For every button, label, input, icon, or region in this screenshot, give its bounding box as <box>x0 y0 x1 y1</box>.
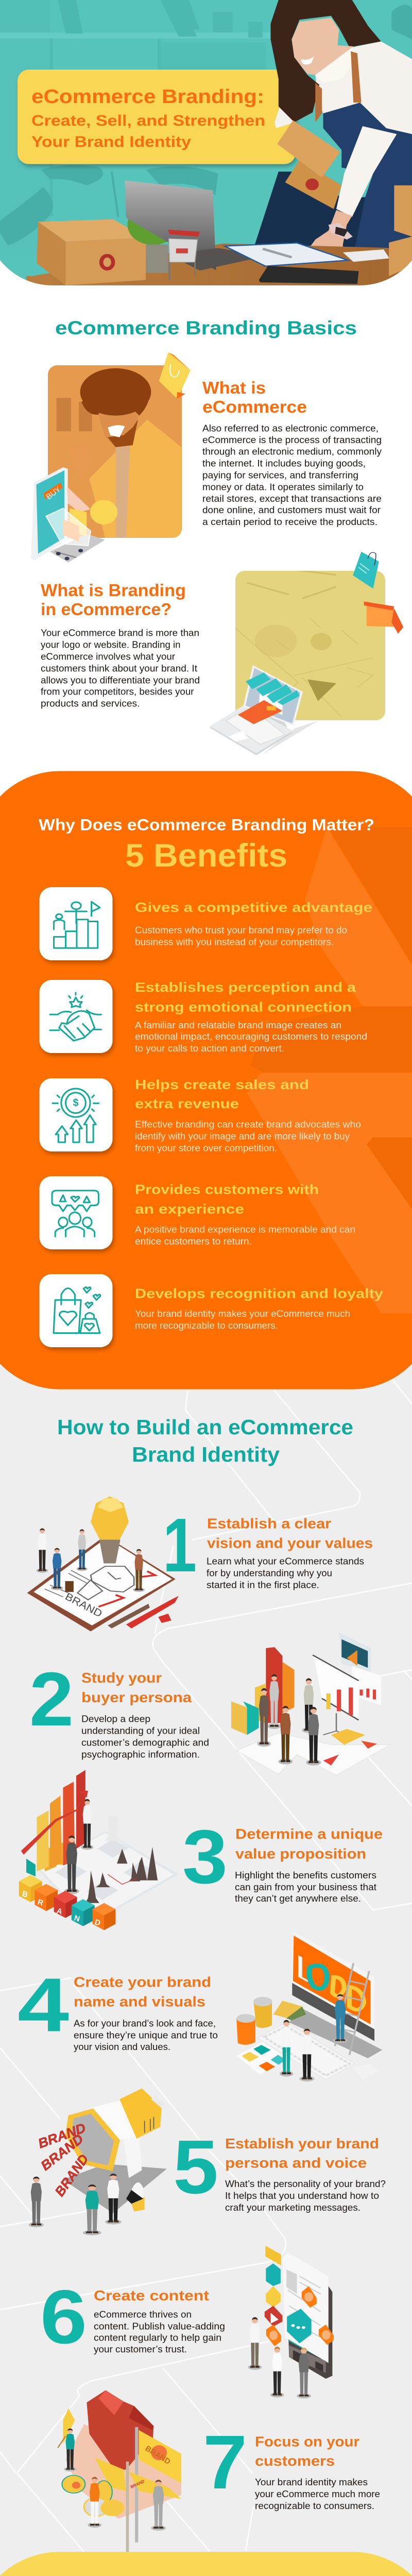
step 6: Create content <box>94 2287 209 2303</box>
megaphone words: BRAND <box>36 2120 88 2151</box>
benefit 4: entice customers to return. <box>135 1236 252 1246</box>
benefit 2: emotional impact, encouraging customers to respond <box>135 1031 367 1042</box>
panel: branding photo with logo sketches <box>210 552 403 755</box>
megaphone words: BRAND <box>52 2151 92 2199</box>
step 2: customer’s demographic and <box>81 1737 209 1748</box>
step 5 <box>29 2088 386 2235</box>
number 6: 6 <box>40 2275 87 2360</box>
step 3: can gain from your business that <box>235 1882 376 1892</box>
step 1: vision and your values <box>207 1535 373 1551</box>
step 7: Focus on your <box>255 2433 359 2449</box>
illustration: team around brand bulb on clipboard <box>27 1496 179 1631</box>
step 1: for by understanding why you <box>207 1568 332 1578</box>
text block: what is eCommerce <box>202 378 382 527</box>
hero title text: Your Brand Identity <box>31 133 191 150</box>
number 1: 1 <box>163 1503 197 1588</box>
step 5: Establish your brand <box>225 2136 379 2151</box>
text block: what is branding in eCommerce <box>41 581 200 708</box>
benefit 4: an experience <box>135 1201 244 1217</box>
step 6 <box>40 2246 334 2398</box>
benefit 2: strong emotional connection <box>135 999 352 1014</box>
text block: what is eCommerce: done online, and customers must wait for <box>202 505 381 515</box>
benefit 1: Customers who trust your brand may prefer to do <box>135 925 347 936</box>
blocks lettering: N <box>73 1913 81 1924</box>
text block: what is branding in eCommerce: customers think about your brand. It <box>41 663 197 673</box>
illustration: team painting a logo on a monitor <box>236 1931 382 2081</box>
blocks lettering: R <box>37 1897 44 1908</box>
benefit 4 <box>39 1176 355 1249</box>
benefit 3 <box>39 1077 361 1153</box>
icon: laptop with awning and credit card <box>210 666 318 755</box>
benefit 1: business with you instead of your competitors. <box>135 937 334 947</box>
step 5: persona and voice <box>225 2155 367 2171</box>
text block: what is branding in eCommerce: from your competitors, besides your <box>41 686 194 697</box>
icon: phone with BUY button and cart <box>31 467 117 563</box>
text block: what is eCommerce: eCommerce is the process of transacting <box>202 435 382 445</box>
heading: 5 benefits: 5 Benefits <box>125 838 287 874</box>
step 3 <box>19 1770 383 1930</box>
icon: competitors on podium <box>54 902 100 948</box>
benefit 4: A positive brand experience is memorable and can <box>135 1224 355 1234</box>
text block: what is eCommerce: through an electronic medium, commonly <box>202 446 382 456</box>
step 7: recognizable to consumers. <box>255 2501 374 2511</box>
step 5: craft your marketing messages. <box>225 2202 360 2213</box>
icon: yellow shopping bag <box>159 352 191 399</box>
heading: eCommerce Branding Basics: eCommerce Branding Basics <box>55 317 357 338</box>
blocks lettering: B <box>21 1889 29 1900</box>
benefit 4: Provides customers with <box>135 1181 319 1197</box>
step 3: they can’t get anywhere else. <box>235 1893 361 1904</box>
step 7: customers <box>255 2453 335 2469</box>
hero title box <box>18 70 296 164</box>
step 2 <box>29 1632 390 1775</box>
text block: what is eCommerce: retail stores, except that transactions are <box>202 494 382 504</box>
icon: orange shopping bag <box>364 601 403 634</box>
benefit 3: Effective branding can create brand advocates who <box>135 1119 361 1129</box>
blocks lettering <box>21 1889 101 1928</box>
text block: what is eCommerce: money or data. It operates similarly to <box>202 482 364 492</box>
illustration: chess strategy board and brand blocks <box>19 1770 179 1930</box>
number 5: 5 <box>173 2125 218 2210</box>
text block: what is branding in eCommerce: What is Branding <box>41 581 186 600</box>
step 3: Determine a unique <box>235 1826 383 1842</box>
text block: what is branding in eCommerce: allows you to differentiate your brand <box>41 675 200 685</box>
step 4: ensure they’re unique and true to <box>74 2030 218 2041</box>
step 4: your vision and values. <box>74 2042 170 2052</box>
heading: how to build an eCommerce brand identity <box>57 1415 353 1466</box>
benefit 1 <box>39 887 372 960</box>
step 7: your eCommerce much more <box>255 2489 380 2499</box>
benefit 3: identify with your image and are more likely to buy <box>135 1131 350 1141</box>
blocks lettering: D <box>94 1918 101 1928</box>
icon: shopping bags with hearts <box>54 1287 100 1333</box>
text block: what is eCommerce: the internet. It includes buying goods, <box>202 458 366 468</box>
step 1: Establish a clear <box>207 1515 331 1531</box>
step 3: value proposition <box>235 1846 366 1862</box>
benefit 5: more recognizable to consumers. <box>135 1320 278 1331</box>
step 7 <box>58 2390 380 2562</box>
benefit 2: A familiar and relatable brand image creates an <box>135 1020 341 1030</box>
hero title text: eCommerce Branding: <box>31 86 264 108</box>
step 4: Create your brand <box>74 1974 211 1990</box>
step 2: Develop a deep <box>81 1714 150 1724</box>
text block: what is eCommerce: Also referred to as electronic commerce, <box>202 423 379 433</box>
illustration: content on a smartphone <box>248 2246 334 2398</box>
text block: what is eCommerce: a certain period to receive the products. <box>202 517 377 527</box>
benefit 5 <box>39 1274 384 1347</box>
text block: what is eCommerce: eCommerce <box>202 397 307 416</box>
step 3: Highlight the benefits customers <box>235 1870 376 1880</box>
illustration: team reviewing charts <box>231 1632 390 1775</box>
blocks lettering: A <box>56 1906 63 1917</box>
icon: handshake and star <box>50 993 101 1041</box>
text block: what is branding in eCommerce: products and services. <box>41 698 140 708</box>
step 5: What’s the personality of your brand? <box>225 2179 386 2189</box>
text block: what is eCommerce: paying for services, and transferring <box>202 470 358 480</box>
heading: how to build an eCommerce brand identity: Brand Identity <box>132 1443 280 1466</box>
illustration: megaphone with brand messages <box>29 2088 167 2235</box>
panel: what is eCommerce photo <box>31 352 191 563</box>
hero banner <box>0 0 412 289</box>
benefit 3: extra revenue <box>135 1096 239 1111</box>
icon: coin and rising arrows <box>53 1089 99 1142</box>
text block: what is branding in eCommerce: eCommerce involves what your <box>41 651 175 662</box>
step 2: psychographic information. <box>81 1749 200 1759</box>
hero photo: woman packing boxes at a desk <box>26 0 412 288</box>
step 7: BRAND <box>144 2444 172 2466</box>
hero title text <box>31 86 265 150</box>
icon: teal shopping bag <box>353 552 379 589</box>
benefit 2 <box>39 979 367 1054</box>
panel: what is eCommerce photo: BUY <box>44 485 62 501</box>
step 6: eCommerce thrives on <box>94 2309 192 2319</box>
step 2: understanding of your ideal <box>81 1726 200 1736</box>
step 2: Study your <box>81 1670 162 1686</box>
text block: what is branding in eCommerce: your logo or website. Branding in <box>41 639 180 650</box>
megaphone words: BRAND <box>38 2131 87 2174</box>
step 1: Learn what your eCommerce stands <box>207 1556 364 1566</box>
text block: what is eCommerce: What is <box>202 378 266 397</box>
number 2: 2 <box>29 1657 74 1742</box>
step 5: It helps that you understand how to <box>225 2191 379 2201</box>
hero title text: Create, Sell, and Strengthen <box>31 112 265 129</box>
heading: why does eCommerce branding matter: Why Does eCommerce Branding Matter? <box>39 815 374 834</box>
step 2: buyer persona <box>81 1689 192 1705</box>
step 6: content regularly to help gain <box>94 2333 221 2343</box>
step 4: As for your brand’s look and face, <box>74 2019 216 2029</box>
benefit 3: $ <box>73 1097 79 1109</box>
icon: customers with ratings bubble <box>52 1191 98 1236</box>
step 1: BRAND <box>63 1591 104 1620</box>
step 7: BRAND <box>130 2479 145 2489</box>
number 7: 7 <box>203 2420 247 2505</box>
step 4 <box>18 1931 382 2081</box>
step 1 <box>27 1496 373 1631</box>
step 4: name and visuals <box>74 1994 205 2010</box>
megaphone words <box>36 2120 92 2199</box>
benefit 3: from your store over competition. <box>135 1143 277 1153</box>
benefit 2: to your calls to action and convert. <box>135 1043 284 1054</box>
step 1: started it in the first place. <box>207 1580 319 1590</box>
benefit 5: Your brand identity makes your eCommerce much <box>135 1309 350 1319</box>
number 3: 3 <box>182 1815 228 1900</box>
benefit 5: Develops recognition and loyalty <box>135 1285 384 1301</box>
panel: orange benefits section <box>0 771 412 1389</box>
text block: what is branding in eCommerce: in eCommerce? <box>41 600 171 619</box>
heading: how to build an eCommerce brand identity: How to Build an eCommerce <box>57 1415 353 1439</box>
number 4: 4 <box>18 1963 69 2047</box>
step 7: Your brand identity makes <box>255 2477 368 2487</box>
step 6: content. Publish value-adding <box>94 2321 225 2332</box>
hero shelves backdrop <box>0 0 412 256</box>
text block: what is branding in eCommerce: Your eCommerce brand is more than <box>41 628 199 638</box>
benefit 2: Establishes perception and a <box>135 979 356 995</box>
step 6: your customer’s trust. <box>94 2344 187 2354</box>
panel: yellow strategies section <box>0 2552 412 2576</box>
benefit 1: Gives a competitive advantage <box>135 900 372 915</box>
illustration: heart in hand with brand flags <box>58 2390 181 2562</box>
benefit 3: Helps create sales and <box>135 1077 309 1092</box>
